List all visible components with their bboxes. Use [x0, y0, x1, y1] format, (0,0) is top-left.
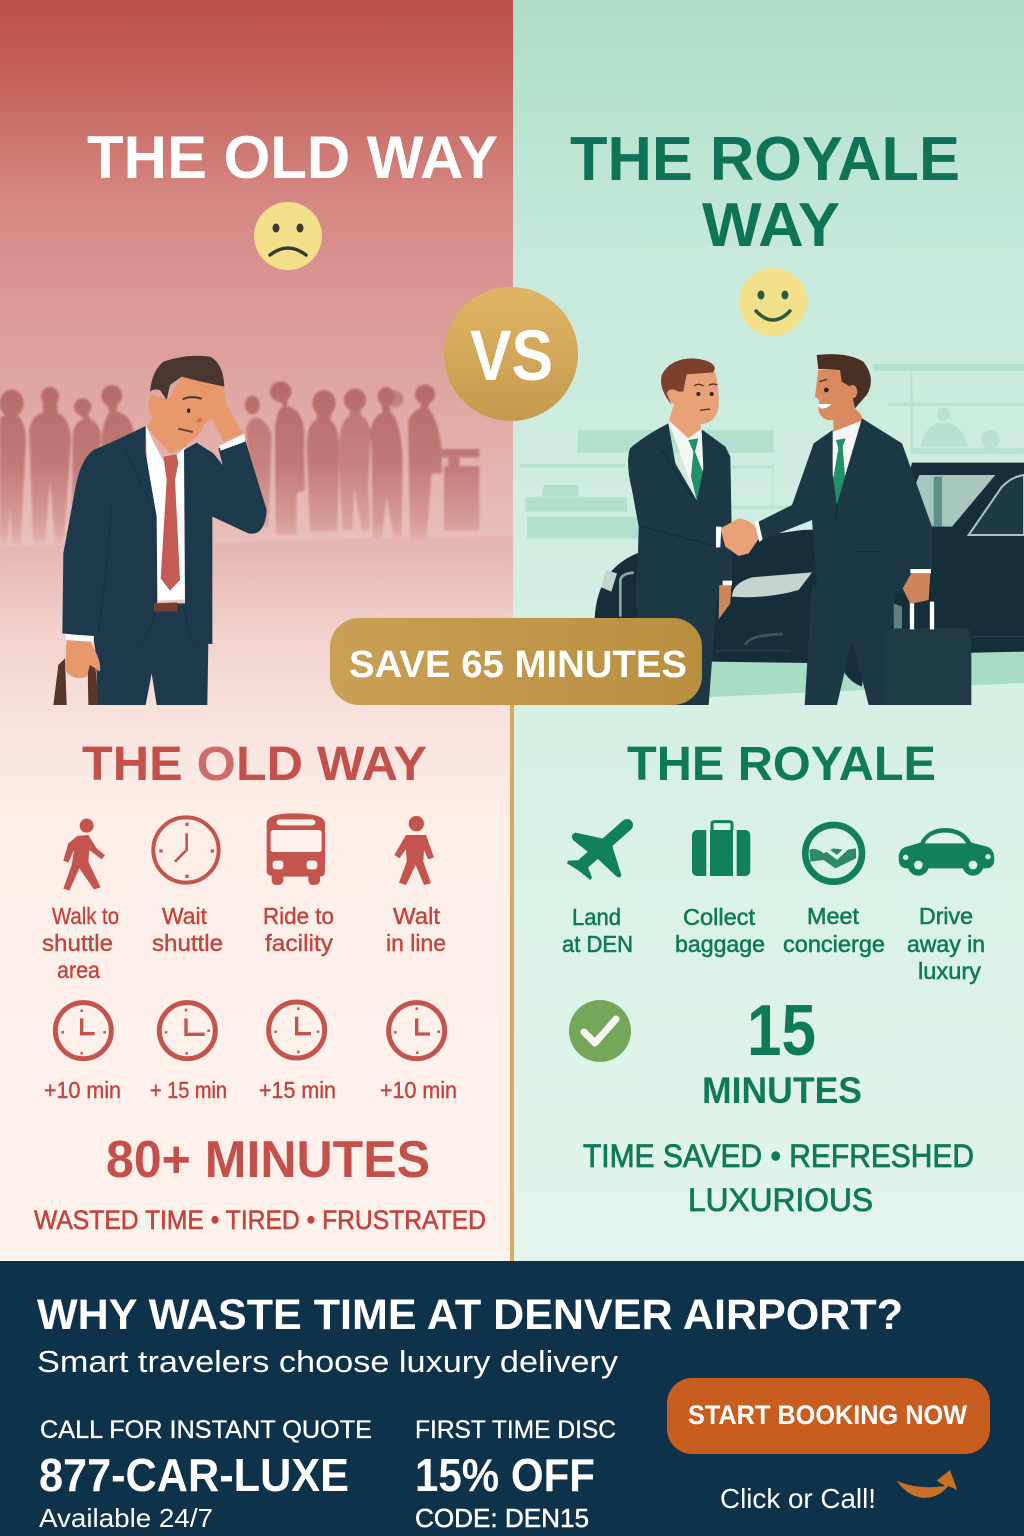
illustration: black luxury car: [595, 463, 1024, 687]
traveler ear: [848, 385, 857, 398]
old way step labels: facility: [265, 930, 334, 956]
traveler hair: [817, 354, 871, 408]
illustration: floor shadow: [0, 536, 513, 625]
icon: concierge handshake badge: [805, 825, 862, 882]
royale step labels: concierge: [783, 931, 885, 957]
lower hand: [65, 640, 100, 678]
subheading: smart travelers: Smart travelers choose luxury delivery: [37, 1344, 619, 1379]
stat: 15 minutes: [702, 991, 862, 1111]
heading: the royale way: THE ROYALE: [570, 125, 960, 194]
tie: [161, 454, 180, 591]
cuffs: [219, 434, 245, 451]
heading: old way steps: THE OLD WAY: [82, 738, 427, 791]
stat: 80+ minutes: 80+ MINUTES: [106, 1131, 430, 1189]
old way step labels: shuttle: [152, 930, 223, 956]
old way step labels: Walk to: [52, 903, 119, 929]
badge: vs: [444, 287, 578, 421]
illustration: stressed businessman: [53, 356, 267, 705]
traveler neck and shirt: [832, 417, 862, 502]
headlight: [732, 572, 812, 597]
concierge suit creases: [642, 450, 717, 547]
button: start booking now: START BOOKING NOW: [688, 1400, 967, 1430]
concierge tie: [688, 438, 703, 500]
icon: sad face: [254, 202, 322, 270]
illustration: concierge and traveler shaking hands: [628, 354, 971, 705]
concierge face: [696, 392, 714, 396]
offer: discount block: CODE: DEN15: [415, 1503, 589, 1533]
icon: clock 1: [55, 1003, 111, 1059]
contact: phone block: CALL FOR INSTANT QUOTE: [40, 1416, 372, 1444]
concierge neck: [669, 405, 701, 440]
old way step labels: in line: [386, 930, 446, 956]
traveler trousers: [805, 585, 895, 705]
icon: clock 3: [269, 1002, 325, 1058]
stat: 15 minutes: 15: [747, 991, 816, 1071]
icon: green check: [569, 1000, 631, 1062]
panel: old way background: [0, 0, 513, 1261]
old way time labels: +10 min: [380, 1077, 457, 1103]
offer: discount block: [415, 1416, 616, 1533]
shirt: [146, 425, 185, 601]
old way step labels: shuttle: [42, 930, 113, 956]
cuffs: [716, 520, 763, 547]
illustration: terminal background: [520, 364, 1024, 538]
royale step labels: luxury: [918, 958, 982, 984]
icon: happy face: [739, 268, 807, 336]
old way time labels: + 15 min: [150, 1077, 227, 1103]
icon: clock 4: [389, 1003, 445, 1059]
icon: shuttle bus: [267, 813, 325, 885]
old way step icons: [63, 813, 434, 891]
royale step labels: away in: [907, 931, 985, 957]
contact: phone block: 877-CAR-LUXE: [39, 1449, 349, 1501]
heading: the old way: THE OLD WAY: [87, 124, 498, 191]
concierge jacket: [628, 423, 732, 598]
traveler smile: [818, 404, 831, 408]
royale step labels: Collect: [683, 904, 756, 930]
caption: wasted time tired frustrated: WASTED TIME • TIRED • FRUSTRATED: [34, 1205, 486, 1235]
royale step labels: Drive: [919, 903, 973, 929]
concierge lower hand: [719, 585, 731, 619]
royale step icons: [567, 822, 994, 882]
arrow: pointing to button: [897, 1470, 957, 1498]
head: [149, 377, 243, 444]
jacket right and raised arm: [184, 439, 267, 644]
heading: royale steps: THE ROYALE: [627, 738, 936, 791]
old way step labels: Wait: [162, 903, 208, 929]
royale step labels: at DEN: [562, 931, 633, 957]
suitcase: [894, 603, 902, 629]
icon: suitcase: [692, 822, 750, 876]
icon: standing person: [394, 816, 434, 885]
concierge hair: [661, 358, 715, 405]
traveler hand: [903, 573, 930, 604]
caption: time saved refreshed luxurious: TIME SAVED • REFRESHED: [583, 1138, 974, 1174]
stat: 15 minutes: MINUTES: [702, 1070, 862, 1111]
old way time labels: +10 min: [44, 1077, 121, 1103]
old way time labels: +15 min: [259, 1077, 336, 1103]
royale step labels: Land: [572, 904, 621, 930]
neck: [147, 418, 190, 453]
panel: royale way background: [513, 0, 1024, 1261]
contact: phone block: Available 24/7: [39, 1503, 213, 1533]
old way step labels: [42, 903, 446, 983]
traveler tie: [833, 438, 846, 504]
illustration: green ground: [708, 650, 1024, 697]
offer: discount block: 15% OFF: [415, 1449, 595, 1501]
hair: [150, 356, 224, 400]
icon: walking person: [63, 819, 105, 891]
heading: the royale way: [570, 125, 960, 260]
icon: wall clock: [153, 817, 219, 883]
old way time labels: [44, 1077, 457, 1103]
caption: time saved refreshed luxurious: LUXURIOUS: [688, 1182, 873, 1218]
belt: [154, 602, 177, 612]
contact: phone block: [39, 1416, 372, 1533]
icon: airplane: [567, 825, 627, 880]
caption: time saved refreshed luxurious: [583, 1138, 974, 1218]
old way step labels: Ride to: [263, 903, 334, 929]
offer: discount block: FIRST TIME DISC: [415, 1416, 616, 1444]
front badge and grille: [601, 570, 617, 592]
suitcase handle: [53, 658, 99, 705]
illustration: crowd in line: [0, 381, 479, 543]
jacket left: [62, 426, 157, 648]
handshake: [720, 518, 760, 556]
suit creases: [98, 452, 197, 648]
royale step labels: Meet: [807, 903, 860, 929]
face details: [183, 397, 202, 399]
concierge trousers: [635, 595, 717, 705]
concierge shirt: [668, 420, 703, 498]
old way step labels: area: [57, 957, 100, 983]
car windows: [899, 475, 995, 527]
panel: call to action banner: [0, 1261, 1024, 1536]
royale step labels: [562, 903, 985, 984]
badge: save 65 minutes: SAVE 65 MINUTES: [349, 644, 687, 686]
old way step labels: Walt: [393, 903, 441, 929]
badge: vs: VS: [470, 317, 553, 396]
traveler suit creases: [835, 503, 882, 552]
badge: save 65 minutes: [330, 618, 702, 705]
traveler jacket: [759, 418, 932, 593]
royale step labels: baggage: [675, 931, 765, 957]
text: click or call: Click or Call!: [720, 1483, 876, 1514]
traveler head: [815, 370, 863, 432]
heading: the royale way: WAY: [702, 191, 840, 260]
icon: car: [899, 828, 994, 876]
old way time clocks: [55, 1002, 445, 1059]
divider: gold center line: [510, 705, 514, 1261]
heading: why waste time: WHY WASTE TIME AT DENVER AIRPORT?: [37, 1291, 903, 1339]
button: start booking now: [667, 1378, 990, 1454]
trousers: [95, 603, 208, 705]
icon: clock 2: [159, 1003, 215, 1059]
concierge head: [667, 372, 719, 424]
